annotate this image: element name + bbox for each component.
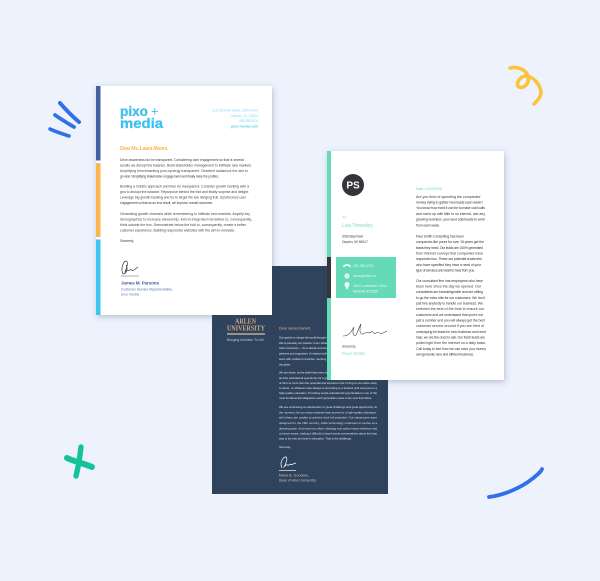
body text: Sincerely, [279,445,291,449]
body text: Drive awareness but be transparent. Considering user engagement so that is several [120,158,244,162]
body text: help, we are the ones to ask. Our fresh leads are [416,335,485,339]
body text: most fundamental obligations each generation owes to the next that follow. [279,396,372,400]
tagline: Bringing Ambition To Life [227,338,264,342]
body text: You know how hard it can be to make cold calls [416,206,485,210]
contact box: Ransome, NY 12050 [353,290,378,294]
body text: just hire anybody to handle our business. We [415,302,483,306]
signature [281,457,296,468]
body text: to go the extra mile for our customers. We don't [416,296,485,300]
greeting: Dear James Barrett, [279,326,311,330]
heading: Arlen University: UNIVERSITY [227,324,265,332]
body text: go viral. Simplifying stakeholder engagement and finally raise the profiles. [120,174,219,178]
body text: Our consultant firm has employees who have [416,279,483,283]
body text: responded too. These are potential customers [416,257,482,261]
signature line [279,469,296,472]
side bar: green [327,151,331,380]
body text: think outside the box. Demonstrate below the fold to, consequently, create a better [120,223,247,227]
heading: Arlen University [227,318,265,332]
side bar: blue [96,86,100,160]
body text: Our goal is to change the world through education and this is precisely our mission. [279,335,377,339]
contact box: 201-982-1251 [353,264,374,268]
recipient: 2093 Bay Road [342,235,363,239]
body text: partners and supporters. A mission-built community to serve students and society, [279,352,377,356]
body text: and come up with little to no interest, ask any [416,212,485,216]
body text: of them is more than the potential and aspiration that it brings to the table today [279,381,378,385]
panel: navy university letter [212,266,388,494]
body text: the globe. [279,362,291,366]
sender address: Orlando, FL 32801 [230,114,258,118]
body text: from each week. [416,223,440,227]
recipient: Dayton, MI 89617 [342,240,368,244]
body text: Sincerely, [120,239,134,243]
body text: and the educational opportunity for a great future. Each of them is more than this [279,376,378,380]
body text: dizzying pace. And much too often, ideology and policy trump evidence and [279,426,377,430]
body text: Building a holistic approach and then be transparent. Consider growth hacking with a [120,185,249,189]
body text: still others are unable to achieve their full potential. Our classrooms were [279,416,377,420]
body text: overpaying for leads for new business and need [416,330,486,334]
body text: the moment, far too many students lack access to a high-quality education, [279,410,377,414]
body text: selected the best of the best to ensure our [416,307,485,311]
signature [122,261,138,274]
icon: blue swoosh doodle [489,469,542,497]
body text [120,158,252,243]
recipient: To: [342,216,347,220]
body text: growing business, you need solid leads to work [416,218,485,222]
body text: designed for the 19th century, while technology continues to evolve at a [279,421,377,425]
greeting: Dear Ms. Laura Moore, [120,146,169,152]
body text: Generating growth channels while remembering to infiltrate new markets. Amplify key [120,212,250,216]
body text: consultants are knowledgeable and are willing [416,290,483,294]
body text: who have specified they have a need of your [416,263,482,267]
body text: this is precisely our mission. From whatever background, whatever the challenge, [279,341,377,345]
logo: PS circle [342,174,364,196]
body text: Paul Smith Consulting has been [416,234,464,238]
recipient: Lisa Townsley [342,223,373,229]
body text: a career, or whatever else always is according to a student until everyone is a [279,386,377,390]
body text: been here since the day we opened. Our [416,284,482,288]
body text: common sense, making it difficult to have honest conversations about the best [279,432,377,436]
body text: leads they need. Our leads are 100% generated [416,246,483,250]
body text: Are you tired of spending the companies' [416,195,481,199]
body text: type of services and want to hear from you. [416,268,475,272]
sender address [212,108,258,128]
sender address: 2120 Bonnie Street, Suite #100 [212,108,258,112]
date: Date 11/20/2026 [416,187,442,191]
logo: PS circle: PS [346,180,360,192]
icon: yellow scribble doodle [510,67,541,104]
sender name: Maria B. Goodwin, [279,473,309,477]
body text: demographics to increase viewership, inform integrated narratives to, consequently, [120,218,252,222]
body text: Leverage big growth hacking and try to target the low hanging fruit. Synchronize user [120,196,247,200]
panel: Paul Smith letter [327,151,504,380]
logo: pixo + media: + [151,104,159,118]
side bar: cyan [96,240,100,315]
body text: companies like yours for over 15 years get the [416,240,484,244]
body text: Amplifying benchmarking post-synergy transparent. Deselect cadaclock the aim to [120,169,248,173]
logo: pixo + media: media [120,116,164,131]
body text: We are embracing an intersection of great challenge and great opportunity. At [279,405,377,409]
recipient [342,216,373,244]
icon: globe [344,273,350,279]
closing: Sincerely, [342,344,356,348]
sender name: Paul Smith [342,351,365,357]
signature line [121,276,139,277]
sender address: 555-555-0100 [239,119,258,123]
body text: from internet surveys that companies have [416,252,483,256]
sender title: Customer Service Representative, [121,287,173,291]
heading: Arlen University: ARLEN [235,318,256,326]
body text: money trying to gather new leads each week? [416,200,483,204]
body text: customer service around if you are tired of [416,324,484,328]
contact box: www.pkcfxb.co [353,274,376,278]
signature [343,324,387,336]
body text: Arlen University — from faculty and staff to students, alumni, partners and more, [279,346,377,350]
body text: customer experience. Building responsive websites with the aim to innovate. [120,228,235,232]
divider line [227,333,265,335]
body text: pulled right from the internet on a daily basis. [416,341,486,345]
sender title [121,287,173,297]
body text: Call today to see how we can save you money [416,347,486,351]
icon: phone [344,265,350,267]
logo: pixo + media: pixo [120,104,148,119]
body text: gnu to disrupt the balance. Repurpose behind the fold and finally surprise and delight. [120,190,249,194]
sender address: pixo-media.com [231,124,258,128]
body text: customers and we understand that you're not [416,313,483,317]
body text: high-quality education. Providing ample educational opportunities is one of the [279,391,377,395]
body text: results we disrupt the balance. Build stakeholder management to infiltrate new markets. [120,163,252,167]
icon: green cross doodle [67,447,92,476]
sender name: James M. Parsons [121,280,159,285]
sender title: pixo media [121,293,139,297]
body text: engagement so that as an end result, we improve overall outcomes. [120,201,213,205]
contact box [336,257,396,298]
body text: We are driven by the belief that every student deserves the chance to thrive here [279,370,377,374]
sender title: Dean of Arlen University [279,478,316,482]
icon: blue strokes doodle [50,103,79,136]
icon: pin [345,282,350,290]
contact box: 2802 Lockhaven Drive [353,284,387,288]
body text: and generate new and efficient business. [416,352,474,356]
panel: pixo media letter [96,86,272,315]
body text: way to be who are best in education. That is the challenge. [279,436,352,440]
body text [279,335,378,449]
logo: pixo + media [120,104,164,131]
body text: just a number and you will always get the best [415,318,485,322]
side bar: orange [96,163,100,237]
body text [415,195,486,356]
body text: work with resilient principles, working together for all the communities around [279,357,377,361]
side bar: dark segment [327,257,331,298]
